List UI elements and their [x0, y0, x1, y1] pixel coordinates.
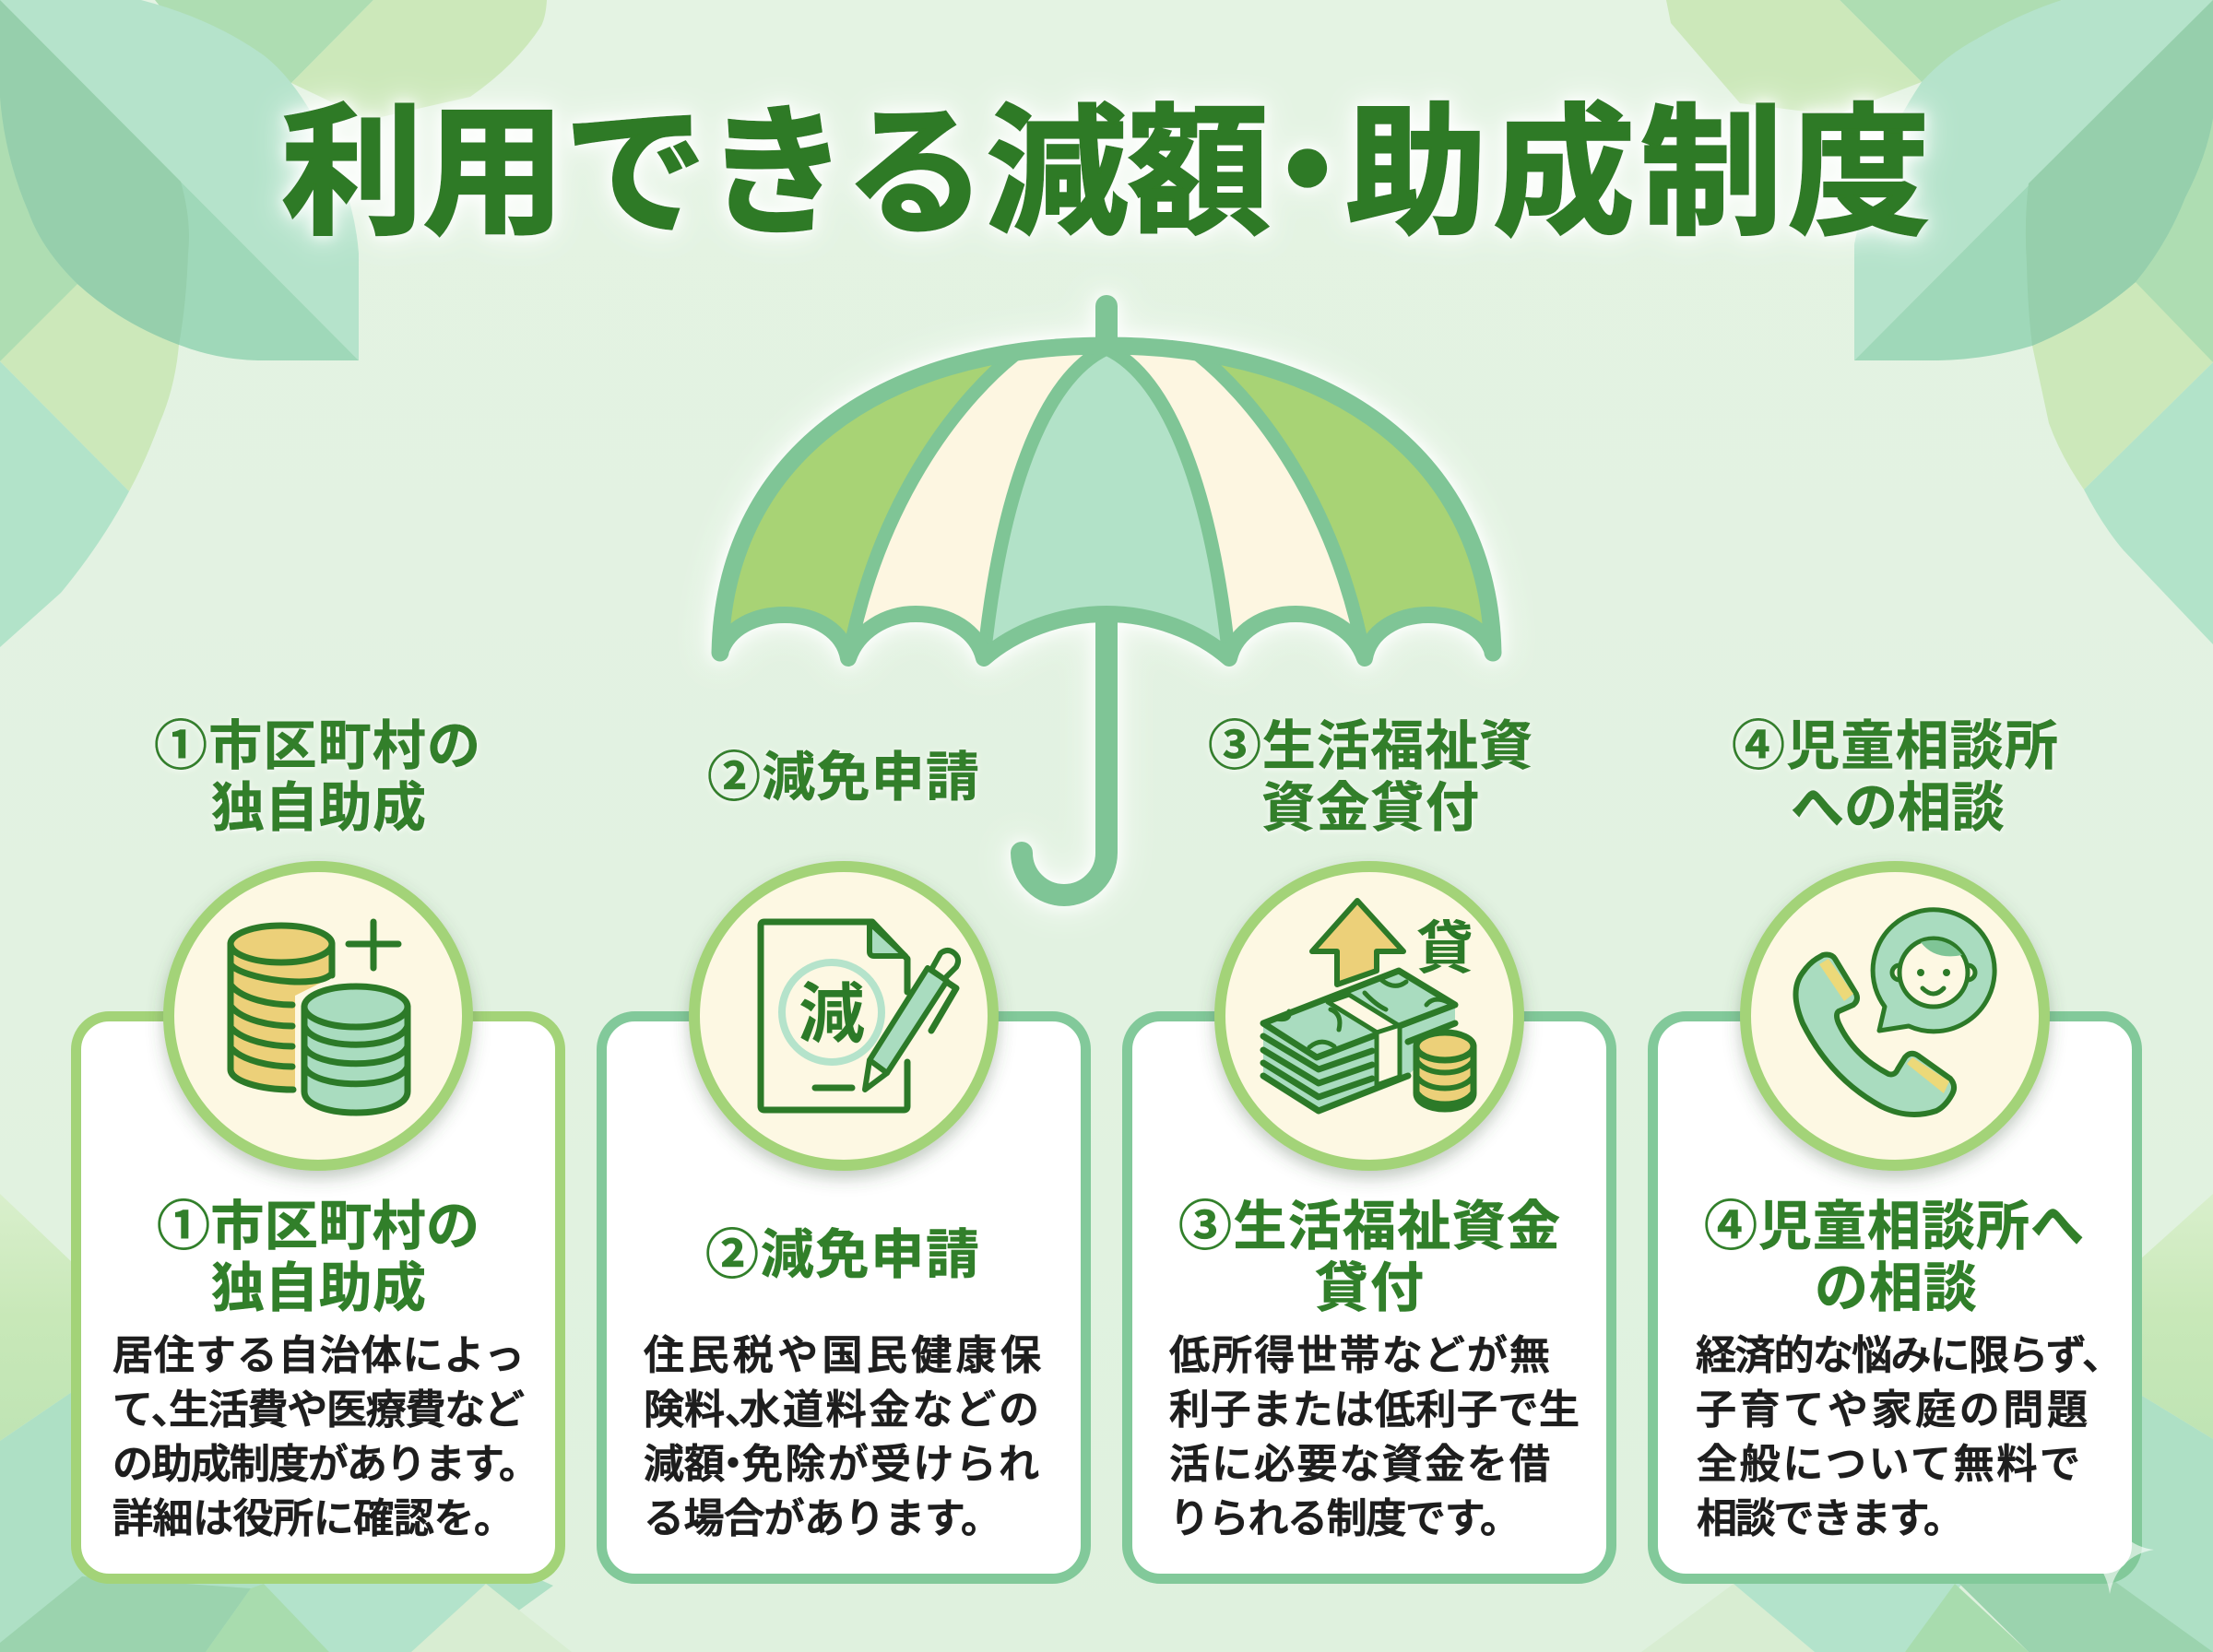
card 2 body text: 険料、	[644, 1387, 765, 1433]
card 3 heading	[1178, 1197, 1560, 1318]
umbrella illustration	[720, 306, 1493, 895]
card 2 body text	[644, 1333, 1041, 1541]
card 2 body text: 水道料金などの	[740, 1387, 1039, 1433]
card 1 body text: 居住する自治体によっ	[112, 1333, 525, 1378]
heading above circle 3	[1208, 716, 1533, 838]
plus sign	[349, 922, 398, 968]
heading above circle 1	[154, 716, 480, 838]
panel: card 2	[601, 1016, 1086, 1578]
card 1 heading	[157, 1197, 479, 1318]
signature line	[815, 1084, 852, 1092]
heading above circle 3: 資金貸付	[1261, 778, 1479, 838]
umbrella canopy	[720, 346, 1493, 658]
umbrella handle	[1022, 608, 1106, 895]
card 1 body text: 生活費や医療費など	[169, 1387, 525, 1433]
document fold	[870, 923, 905, 956]
heading above circle 3: ③生活福祉資	[1208, 716, 1533, 776]
gold coins	[1416, 1032, 1473, 1109]
heading above circle 2: ②減免申請	[707, 748, 979, 808]
card 3 body text: 低所得世帯などが無	[1169, 1333, 1550, 1378]
document outline	[761, 922, 907, 1110]
gold coin stack	[231, 926, 332, 1090]
card 4 body text: 全般について無料で	[1697, 1442, 2080, 1487]
card 4 heading: ④児童相談所へ	[1704, 1197, 2084, 1257]
card 1 body text: 詳細は役所に確認を。	[112, 1496, 515, 1541]
speech bubble	[1873, 910, 1994, 1032]
heading above circle 4: への相談	[1791, 778, 2005, 838]
heading above circle 4: ④児童相談所	[1732, 716, 2058, 776]
reduction stamp: 減	[799, 978, 865, 1052]
sparkle mark	[2069, 1504, 2154, 1594]
mint coin stack	[304, 986, 408, 1113]
card 1 body text: の助成制度があります。	[112, 1442, 539, 1487]
heading above circle 1: ①市区町村の	[154, 716, 480, 776]
child face	[1892, 938, 1975, 1007]
up arrow	[1312, 901, 1403, 985]
card 3 heading: ③生活福祉資金	[1178, 1197, 1560, 1257]
background leaves: top left	[0, 0, 547, 647]
card 4 body text: 相談できます。	[1697, 1496, 1964, 1541]
icon: application document with pen	[694, 867, 993, 1165]
card 3 body text	[1169, 1333, 1580, 1541]
card 4 heading: の相談	[1815, 1258, 1977, 1318]
card 3 body text: 活に必要な資金を借	[1169, 1442, 1550, 1487]
card 4 body text	[1696, 1333, 2123, 1541]
reduction stamp	[782, 962, 882, 1062]
background leaves: bottom right	[1641, 1194, 2213, 1652]
card 4 body text: 経済的な悩みに限らず、	[1696, 1333, 2123, 1378]
card 3 heading: 貸付	[1315, 1258, 1424, 1318]
title: ・	[1237, 94, 1379, 253]
pen	[865, 950, 958, 1090]
card 2 heading: ②減免申請	[705, 1225, 979, 1285]
panel: card 4	[1652, 1016, 2137, 1578]
card 1 body text	[112, 1333, 539, 1541]
background leaves: top right	[1666, 0, 2213, 644]
loan character: 貸	[1416, 917, 1473, 981]
card 2 body text: 住民税や国民健康保	[644, 1333, 1041, 1378]
title: 利用できる減額	[281, 94, 1270, 253]
card 2 body text: 減額	[644, 1442, 725, 1487]
card 1 heading: 独自助成	[211, 1258, 426, 1318]
umbrella ferrule	[1095, 306, 1118, 350]
card 4 body text: 子育てや家庭の問題	[1696, 1387, 2088, 1433]
card 1 heading: ①市区町村の	[157, 1197, 479, 1257]
heading above circle 4	[1732, 716, 2058, 838]
icon: telephone and child consultation	[1746, 867, 2044, 1165]
card 2 body text: 免除が受けられ	[742, 1442, 1039, 1487]
background leaves: bottom left	[0, 1194, 572, 1652]
card 4 heading	[1704, 1197, 2084, 1318]
card 3 body text: 利子または低利子で生	[1169, 1387, 1580, 1433]
card 2 body text: ・	[713, 1442, 753, 1487]
card 1 body text: て、	[112, 1387, 192, 1433]
icon: money stack and loan arrow	[1220, 867, 1519, 1165]
heading above circle 1: 独自助成	[211, 778, 426, 838]
panel: card 3	[1127, 1016, 1612, 1578]
icon: coins with plus	[169, 867, 467, 1165]
telephone handset	[1796, 955, 1954, 1115]
title: 助成制度	[1345, 94, 1930, 253]
title	[281, 94, 1930, 253]
card 2 body text: る場合があります。	[644, 1496, 1001, 1541]
panel: card 1	[76, 1016, 561, 1578]
banknote bundle	[1263, 971, 1455, 1111]
card 3 body text: りられる制度です。	[1169, 1496, 1521, 1541]
